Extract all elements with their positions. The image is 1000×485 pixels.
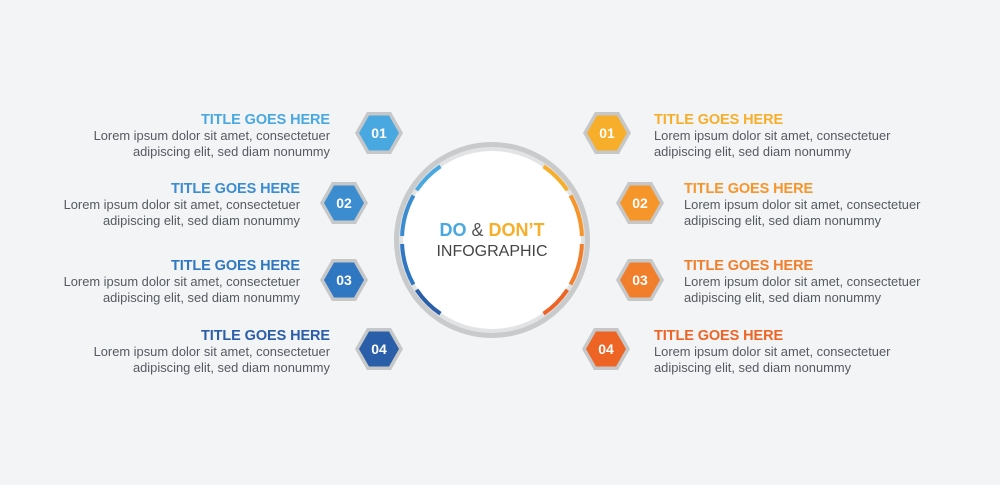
right item 01: TITLE GOES HERE <box>654 112 783 128</box>
left item 04 <box>94 328 403 375</box>
left item 04: 04 <box>371 341 387 357</box>
right item 02: adipiscing elit, sed diam nonummy <box>684 213 882 228</box>
right item 01 <box>583 112 891 159</box>
center circle <box>394 142 590 338</box>
right item 03: 03 <box>632 272 648 288</box>
right item 04: TITLE GOES HERE <box>654 328 783 344</box>
right item 03: Lorem ipsum dolor sit amet, consectetuer <box>684 274 921 289</box>
left item 02: TITLE GOES HERE <box>171 181 300 197</box>
left item 03: Lorem ipsum dolor sit amet, consectetuer <box>64 274 301 289</box>
heading <box>436 220 548 260</box>
right item 02 <box>616 181 921 228</box>
heading: INFOGRAPHIC <box>436 243 548 260</box>
right item 03 <box>616 258 921 305</box>
right item 01: Lorem ipsum dolor sit amet, consectetuer <box>654 128 891 143</box>
right item 02: Lorem ipsum dolor sit amet, consectetuer <box>684 197 921 212</box>
left item 03 <box>64 258 368 305</box>
left item 04: TITLE GOES HERE <box>201 328 330 344</box>
left item 02: Lorem ipsum dolor sit amet, consectetuer <box>64 197 301 212</box>
left item 01: TITLE GOES HERE <box>201 112 330 128</box>
left item 02: 02 <box>336 195 352 211</box>
right item 02: TITLE GOES HERE <box>684 181 813 197</box>
right item 03: adipiscing elit, sed diam nonummy <box>684 290 882 305</box>
left item 03: adipiscing elit, sed diam nonummy <box>103 290 301 305</box>
right item 04: 04 <box>598 341 614 357</box>
left item 02 <box>64 181 368 228</box>
left item 03: TITLE GOES HERE <box>171 258 300 274</box>
right item 01: adipiscing elit, sed diam nonummy <box>654 144 852 159</box>
right item 02: 02 <box>632 195 648 211</box>
left item 01 <box>94 112 403 159</box>
left item 01: adipiscing elit, sed diam nonummy <box>133 144 331 159</box>
left item 03: 03 <box>336 272 352 288</box>
right item 04 <box>582 328 891 375</box>
right item 04: Lorem ipsum dolor sit amet, consectetuer <box>654 344 891 359</box>
right item 01: 01 <box>599 125 615 141</box>
heading: DO & DON’T <box>439 220 545 240</box>
left item 02: adipiscing elit, sed diam nonummy <box>103 213 301 228</box>
left item 01: Lorem ipsum dolor sit amet, consectetuer <box>94 128 331 143</box>
left item 04: Lorem ipsum dolor sit amet, consectetuer <box>94 344 331 359</box>
right item 03: TITLE GOES HERE <box>684 258 813 274</box>
left item 04: adipiscing elit, sed diam nonummy <box>133 360 331 375</box>
left item 01: 01 <box>371 125 387 141</box>
right item 04: adipiscing elit, sed diam nonummy <box>654 360 852 375</box>
